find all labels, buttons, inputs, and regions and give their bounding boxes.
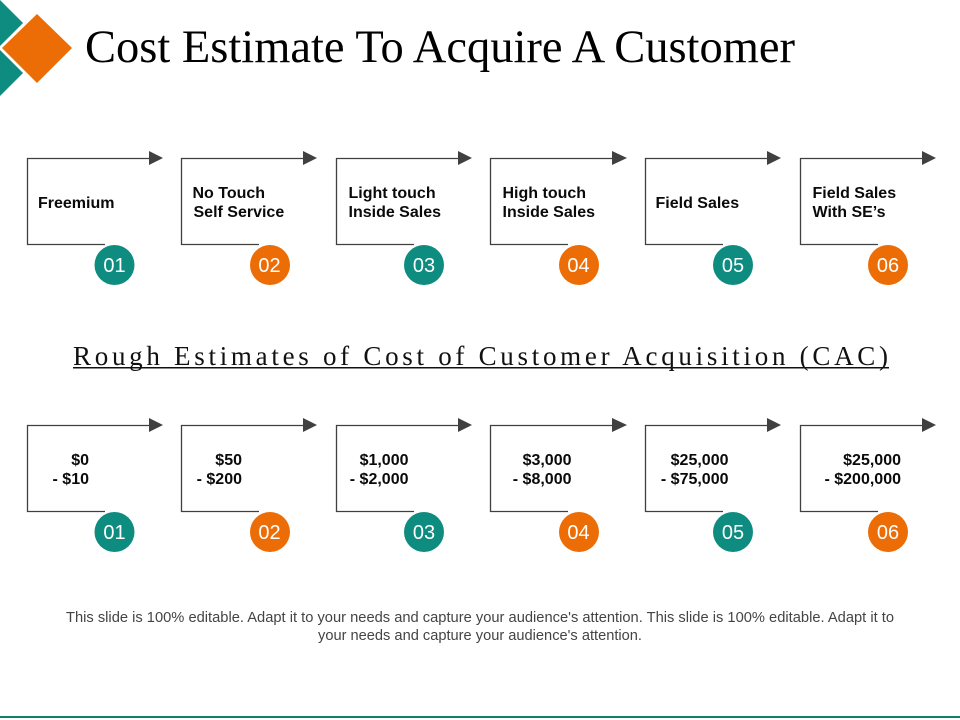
- cost 2: $50 - $200: $50: [215, 452, 242, 469]
- step 4: High touch Inside Sales: [490, 151, 627, 285]
- footer text block: This slide is 100% editable. Adapt it to your needs and capture your audience's attention. This slide is 100% editable. Adapt it to: [66, 610, 894, 626]
- icon: logo diamonds: [0, 0, 72, 96]
- cost 1: $0 - $10: [28, 418, 163, 552]
- step 3: Light touch Inside Sales: [336, 151, 472, 285]
- cost 6: $25,000 - $200,000: 06: [877, 522, 899, 544]
- step 2: No Touch Self Service: No Touch: [192, 185, 265, 202]
- step 1: Freemium: [28, 151, 163, 285]
- step 6: Field Sales With SE's: [800, 151, 936, 285]
- step 1: Freemium: Freemium: [38, 195, 114, 212]
- cost 1: $0 - $10: 01: [103, 522, 126, 544]
- step 4: High touch Inside Sales: Inside Sales: [502, 204, 595, 221]
- cost 3: $1,000 - $2,000: [336, 418, 472, 552]
- panel: customer approaches: [28, 151, 936, 285]
- cost 3: $1,000 - $2,000: 03: [413, 522, 435, 544]
- title: Cost Estimate To Acquire A Customer: [85, 21, 795, 73]
- cost 5: $25,000 - $75,000: - $75,000: [661, 471, 729, 488]
- step 3: Light touch Inside Sales: 03: [413, 255, 435, 277]
- step 4: High touch Inside Sales: High touch: [502, 185, 586, 202]
- step 6: Field Sales With SE's: 06: [877, 255, 899, 277]
- step 1: Freemium: 01: [103, 255, 126, 277]
- step 5: Field Sales: 05: [722, 255, 744, 277]
- cost 6: $25,000 - $200,000: [800, 418, 936, 552]
- cost 1: $0 - $10: - $10: [53, 471, 89, 488]
- cost 2: $50 - $200: [182, 418, 317, 552]
- step 4: High touch Inside Sales: 04: [567, 255, 590, 277]
- footer text block: [66, 610, 894, 644]
- heading: rough estimates: Rough Estimates of Cost of Customer Acquisition (CAC): [73, 341, 888, 371]
- step 2: No Touch Self Service: Self Service: [194, 204, 284, 221]
- cost 6: $25,000 - $200,000: $25,000: [843, 452, 901, 469]
- cost 5: $25,000 - $75,000: $25,000: [671, 452, 729, 469]
- step 5: Field Sales: Field Sales: [656, 195, 739, 212]
- cost 2: $50 - $200: - $200: [197, 471, 242, 488]
- cost 3: $1,000 - $2,000: $1,000: [360, 452, 409, 469]
- step 2: No Touch Self Service: [182, 151, 317, 285]
- cost 5: $25,000 - $75,000: [646, 418, 781, 552]
- cost 4: $3,000 - $8,000: 04: [567, 522, 590, 544]
- cost 4: $3,000 - $8,000: [490, 418, 627, 552]
- step 5: Field Sales: [646, 151, 781, 285]
- step 6: Field Sales With SE's: With SE’s: [812, 204, 886, 221]
- step 2: No Touch Self Service: 02: [258, 255, 281, 277]
- panel: cost estimates: [28, 418, 936, 552]
- cost 1: $0 - $10: $0: [71, 452, 89, 469]
- step 6: Field Sales With SE's: Field Sales: [812, 185, 896, 202]
- cost 4: $3,000 - $8,000: - $8,000: [513, 471, 572, 488]
- cost 6: $25,000 - $200,000: - $200,000: [824, 471, 901, 488]
- cost 5: $25,000 - $75,000: 05: [722, 522, 744, 544]
- cost 2: $50 - $200: 02: [258, 522, 281, 544]
- cost 3: $1,000 - $2,000: - $2,000: [350, 471, 409, 488]
- footer text block: your needs and capture your audience's attention.: [318, 628, 642, 644]
- step 3: Light touch Inside Sales: Inside Sales: [348, 204, 441, 221]
- step 3: Light touch Inside Sales: Light touch: [348, 185, 436, 202]
- cost 4: $3,000 - $8,000: $3,000: [523, 452, 572, 469]
